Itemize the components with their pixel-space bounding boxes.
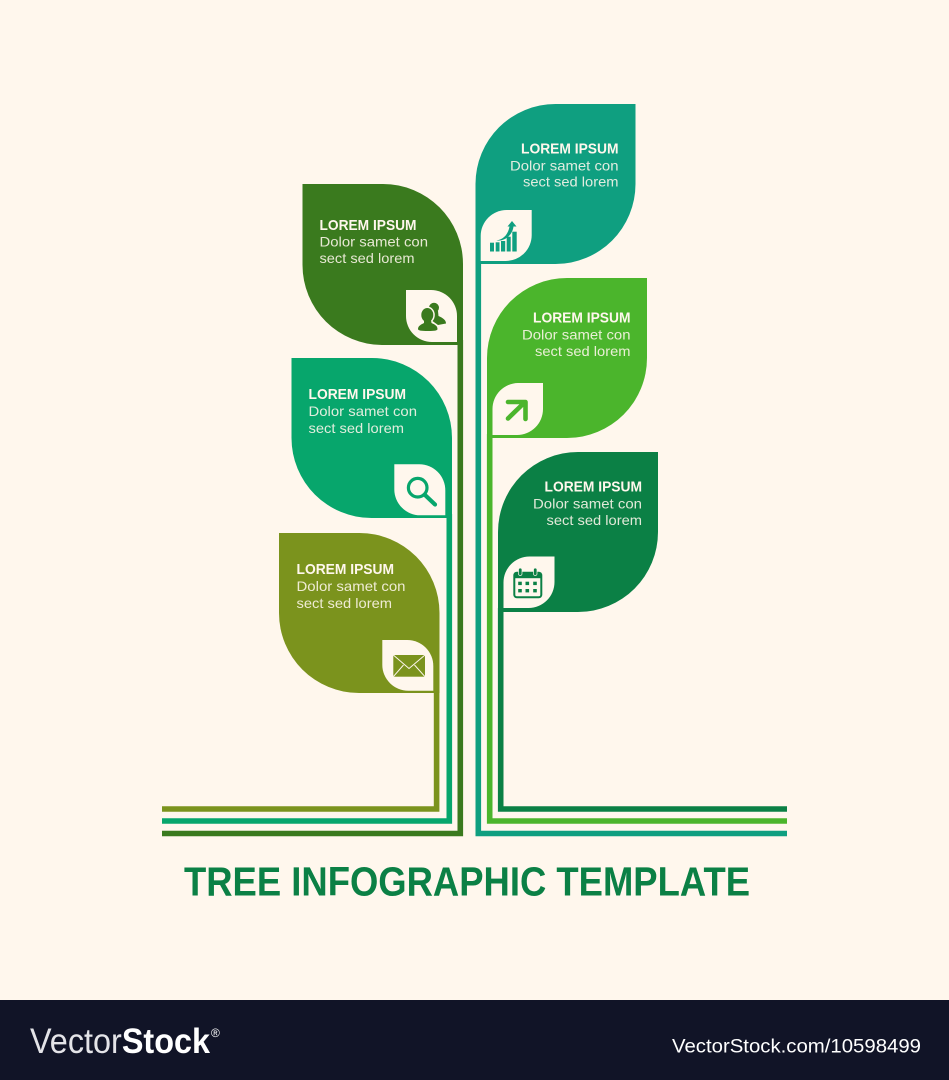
heading: dark emerald leaf: LOREM IPSUM: [544, 478, 642, 496]
footer bar: [0, 1000, 949, 1080]
icon inset: olive leaf: [382, 640, 433, 691]
text: olive leaf line 1: Dolor samet con: [296, 578, 406, 594]
text: dark emerald leaf line 2: sect sed lorem: [546, 512, 642, 528]
icon: envelope: [393, 655, 425, 677]
heading: light green leaf: LOREM IPSUM: [533, 310, 630, 326]
text: light green leaf line 2: sect sed lorem: [535, 343, 630, 359]
heading: green leaf: LOREM IPSUM: [308, 386, 406, 403]
title: TREE INFOGRAPHIC TEMPLATE: [184, 858, 750, 904]
panel: leaf olive: [279, 533, 440, 693]
text: green leaf line 2: sect sed lorem: [308, 420, 404, 436]
stem: dark green left: [162, 340, 460, 834]
panel: leaf green: [292, 358, 452, 518]
heading: dark green leaf: LOREM IPSUM: [320, 217, 416, 234]
heading: teal leaf: LOREM IPSUM: [521, 140, 618, 158]
icon inset: green leaf: [394, 464, 445, 515]
stem: green left: [162, 514, 449, 821]
stem: teal right: [478, 260, 787, 834]
text: olive leaf line 2: sect sed lorem: [296, 595, 392, 611]
icon: calendar: [514, 568, 541, 597]
panel: leaf dark green: [302, 184, 463, 345]
icon: arrow: [508, 402, 526, 419]
footer registered mark: ®: [211, 1026, 220, 1040]
icon: people: [418, 303, 446, 331]
text: dark emerald leaf line 1: Dolor samet con: [533, 496, 642, 512]
text: teal leaf line 2: sect sed lorem: [523, 174, 618, 190]
stem: dark emerald right: [501, 608, 787, 809]
text: green leaf line 1: Dolor samet con: [308, 403, 417, 419]
stem: light green right: [490, 434, 787, 821]
text: dark green leaf line 1: Dolor samet con: [320, 234, 428, 250]
icon inset: teal leaf: [481, 210, 532, 261]
icon: magnifier: [408, 478, 435, 504]
panel: leaf dark emerald: [498, 452, 658, 612]
stem: olive left: [162, 689, 437, 809]
icon inset: dark emerald leaf: [504, 556, 554, 608]
heading: olive leaf: LOREM IPSUM: [296, 561, 394, 578]
footer logo: VectorStock: [30, 1022, 210, 1061]
icon inset: dark green leaf: [406, 290, 457, 342]
panel: leaf light green: [487, 278, 647, 438]
footer url: VectorStock.com/10598499: [672, 1036, 921, 1058]
icon inset: light green leaf: [492, 383, 543, 435]
icon: growth chart: [490, 221, 517, 252]
text: teal leaf line 1: Dolor samet con: [510, 157, 618, 173]
text: dark green leaf line 2: sect sed lorem: [320, 250, 414, 266]
panel: leaf teal: [476, 104, 636, 264]
text: light green leaf line 1: Dolor samet con: [522, 326, 630, 342]
